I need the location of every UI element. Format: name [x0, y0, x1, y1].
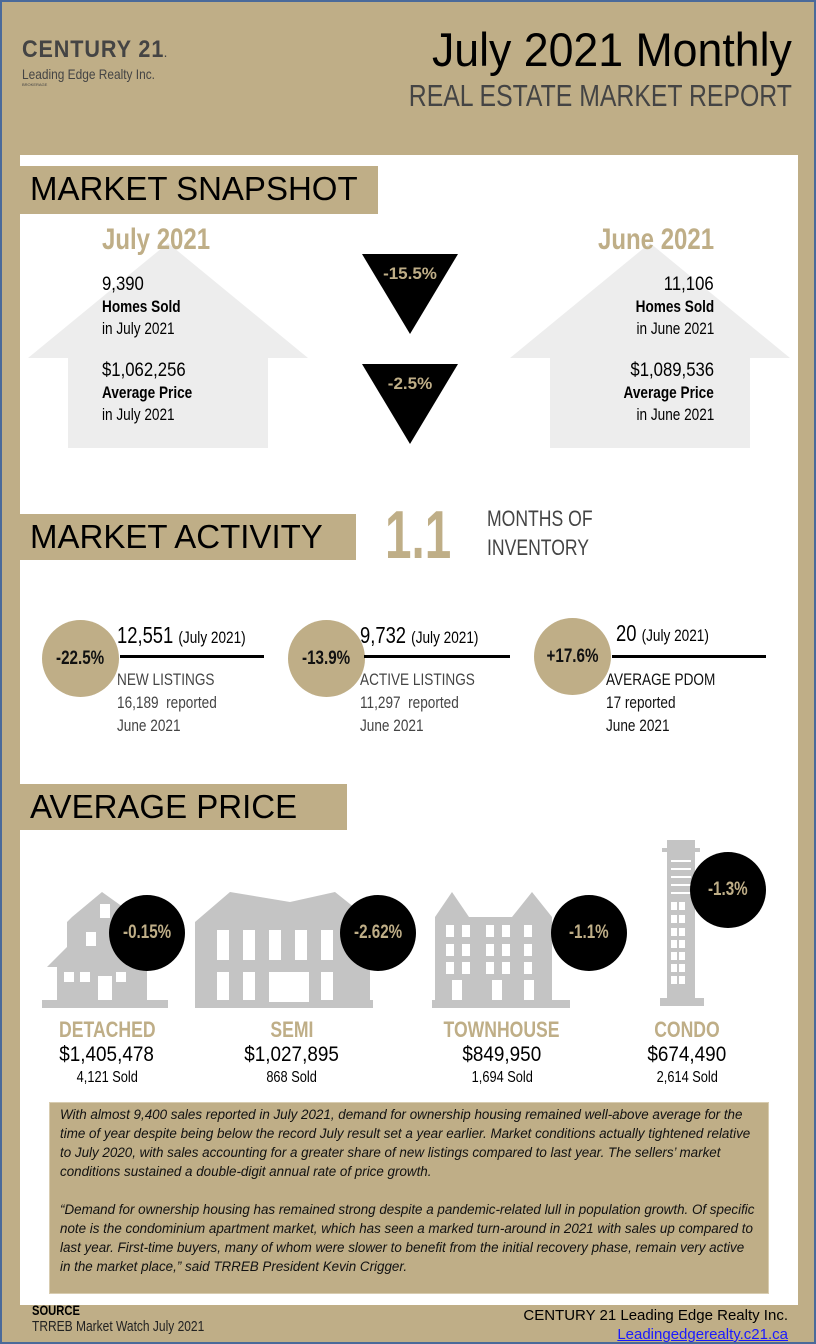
- price: townhouse: $849,950: [463, 1043, 541, 1066]
- price: semi: SEMI: [270, 1017, 314, 1042]
- months of inventory: MONTHS OF: [487, 506, 593, 531]
- badge: detached: -0.15%: [123, 922, 171, 943]
- arrow: homes sold change: [362, 254, 458, 334]
- July column: Homes Sold: [102, 297, 181, 316]
- logo: Leading Edge Realty Inc.: [22, 66, 155, 82]
- heading: average price: AVERAGE PRICE: [30, 788, 297, 825]
- price: semi: [244, 1017, 339, 1086]
- badge: condo: -1.3%: [708, 879, 748, 900]
- logo: BROKERAGE: [22, 82, 47, 87]
- July column: Average Price: [102, 383, 192, 402]
- commentary text box: [49, 1102, 769, 1294]
- months of inventory: INVENTORY: [487, 535, 589, 560]
- badge: townhouse: [551, 895, 627, 971]
- source: SOURCE: [32, 1302, 80, 1318]
- price: townhouse: 1,694 Sold: [471, 1069, 533, 1086]
- stat: active listings: June 2021: [360, 716, 424, 735]
- price: condo: CONDO: [654, 1017, 720, 1042]
- arrow: homes sold change: -15.5%: [383, 264, 437, 283]
- title: July 2021 Monthly: [432, 23, 792, 76]
- icon: townhouse: [432, 892, 570, 1008]
- badge: townhouse: -1.1%: [569, 922, 609, 943]
- icon: semi: [195, 892, 373, 1008]
- title: REAL ESTATE MARKET REPORT: [409, 78, 792, 113]
- badge: condo: [690, 852, 766, 928]
- price: detached: DETACHED: [59, 1017, 155, 1042]
- price: semi: 868 Sold: [267, 1069, 317, 1086]
- stat: average pdom: 17 reported: [606, 693, 676, 712]
- June column: Homes Sold: [635, 297, 714, 316]
- logo: [22, 36, 168, 87]
- footer contact: Leadingedgerealty.c21.ca: [617, 1326, 788, 1343]
- July column: in July 2021: [102, 319, 175, 338]
- heading: market activity: MARKET ACTIVITY: [30, 518, 323, 555]
- badge: detached: [109, 895, 185, 971]
- July column: in July 2021: [102, 405, 175, 424]
- July column: [102, 223, 210, 424]
- June column: $1,089,536: [630, 360, 714, 381]
- title: [409, 23, 792, 113]
- stat: average pdom: June 2021: [606, 716, 670, 735]
- stat: new listings: June 2021: [117, 716, 181, 735]
- arrow: avg price change: [362, 364, 458, 444]
- months of inventory: [385, 497, 593, 573]
- stat: active listings: [288, 620, 510, 735]
- icon: detached: [42, 892, 168, 1008]
- house background right: [510, 243, 790, 448]
- heading: market snapshot: MARKET SNAPSHOT: [30, 170, 358, 207]
- stat: average pdom: [534, 618, 766, 735]
- footer contact: [523, 1307, 788, 1343]
- stat: active listings: 9,732 (July 2021): [360, 622, 478, 648]
- badge: semi: [340, 895, 416, 971]
- logo: CENTURY 21.: [22, 36, 168, 63]
- source: TRREB Market Watch July 2021: [32, 1318, 204, 1335]
- June column: 11,106: [664, 274, 714, 295]
- stat: new listings: 16,189 reported: [117, 693, 217, 712]
- price: condo: $674,490: [648, 1043, 726, 1066]
- stat: new listings: [42, 620, 264, 735]
- price: condo: [648, 1017, 726, 1086]
- stat: active listings: -13.9%: [302, 648, 351, 668]
- June column: [598, 223, 714, 424]
- stat: average pdom: AVERAGE PDOM: [606, 670, 715, 689]
- price: townhouse: [444, 1017, 560, 1086]
- stat: new listings: 12,551 (July 2021): [117, 622, 246, 648]
- price: detached: [59, 1017, 155, 1086]
- arrow: avg price change: -2.5%: [388, 374, 432, 393]
- price: semi: $1,027,895: [245, 1043, 339, 1066]
- price: detached: $1,405,478: [60, 1043, 154, 1066]
- badge: semi: -2.62%: [354, 922, 402, 943]
- icon: condo: [660, 840, 704, 1006]
- stat: new listings: -22.5%: [56, 648, 105, 668]
- source: [32, 1302, 204, 1335]
- July column: July 2021: [102, 223, 210, 256]
- commentary text box: “Demand for ownership housing has remained strong despite a pandemic-related lull in population growth. Of specific note is the condominium apartment market, which has seen a marked turn-around in 2021 with sales up compared to last year. First-time buyers, many of whom were slower to benefit from the initial recovery phase, remain very active in the market place,” said TRREB President Kevin Crigger.: [60, 1202, 754, 1274]
- July column: $1,062,256: [102, 360, 186, 381]
- footer contact: CENTURY 21 Leading Edge Realty Inc.: [523, 1307, 788, 1324]
- months of inventory: 1.1: [385, 497, 451, 573]
- June column: in June 2021: [636, 319, 714, 338]
- June column: Average Price: [624, 383, 714, 402]
- heading: average price: [20, 784, 347, 830]
- stat: new listings: NEW LISTINGS: [117, 670, 214, 689]
- price: townhouse: TOWNHOUSE: [444, 1017, 560, 1042]
- price: detached: 4,121 Sold: [76, 1069, 138, 1086]
- stat: active listings: ACTIVE LISTINGS: [360, 670, 475, 689]
- stat: active listings: 11,297 reported: [360, 693, 459, 712]
- price: condo: 2,614 Sold: [656, 1069, 718, 1086]
- house background left: [28, 243, 308, 448]
- July column: 9,390: [102, 274, 144, 295]
- stat: average pdom: 20 (July 2021): [616, 620, 709, 646]
- commentary text box: With almost 9,400 sales reported in July 2021, demand for ownership housing remained well-above average for the time of year despite being below the record July result set a year earlier. Market conditions actually tightened relative to July 2020, with sales accounting for a greater share of new listings compared to last year. The sellers’ market conditions sustained a double-digit annual rate of price growth.: [60, 1107, 750, 1179]
- stat: average pdom: +17.6%: [546, 646, 598, 666]
- June column: June 2021: [598, 223, 714, 256]
- June column: in June 2021: [636, 405, 714, 424]
